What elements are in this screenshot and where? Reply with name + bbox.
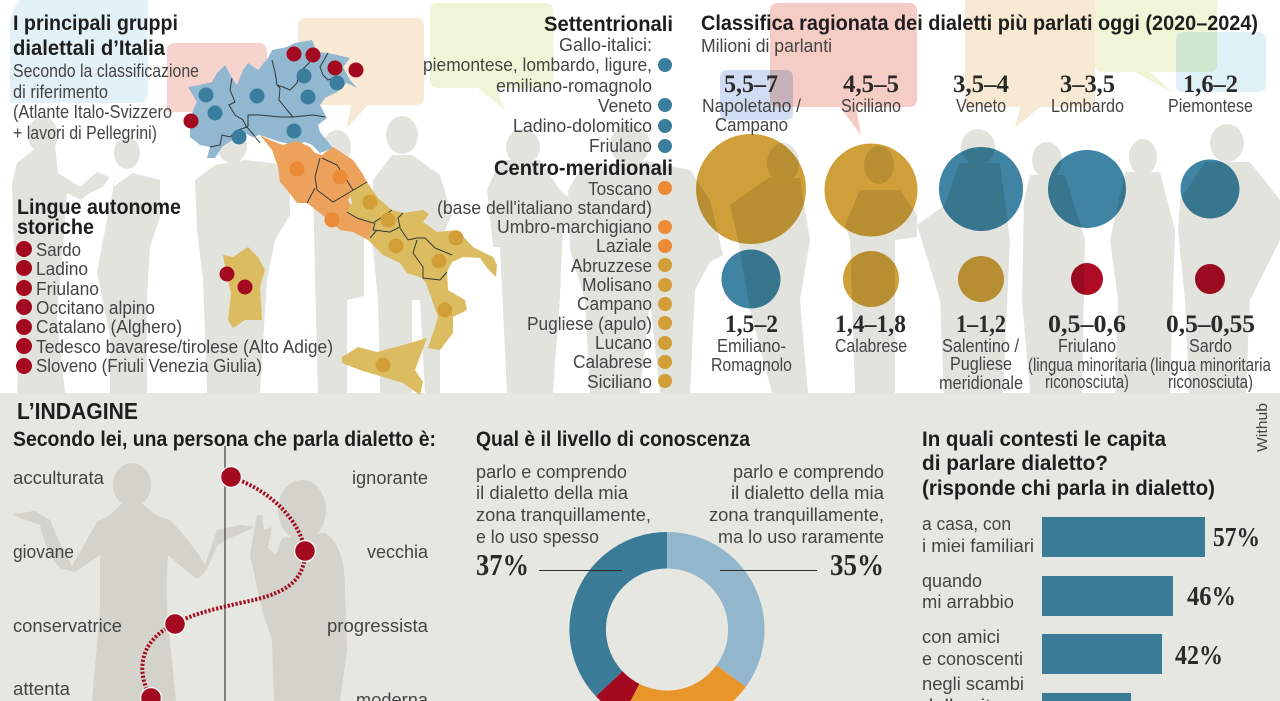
legend: historic autonomous languages: Catalano (Alghero) — [36, 317, 182, 337]
legend: northern dialects: Gallo-italici: — [559, 35, 652, 55]
heading: ranking: Milioni di parlanti — [701, 36, 832, 56]
bubble chart: speakers per dialect: Calabrese — [835, 336, 907, 356]
donut label: 37%: parlo e comprendo — [476, 462, 627, 482]
region: Sardinia — [223, 247, 265, 328]
region: north — [188, 40, 357, 158]
text block: classification source: (Atlante Italo-Svizzero — [13, 102, 172, 122]
legend: central-southern dialects: (base dell'italiano standard) — [437, 198, 652, 218]
source credit: Withub — [1254, 403, 1271, 452]
donut label: 35%: ma lo uso raramente — [718, 527, 884, 547]
donut label: 37% — [476, 462, 651, 582]
bubble chart: speakers per dialect: (lingua minoritaria — [1028, 355, 1148, 375]
legend: historic autonomous languages — [16, 196, 333, 376]
bar chart: contexts: 42% — [1175, 640, 1223, 670]
silhouettes: two people talking — [13, 463, 347, 701]
legend: northern dialects: Settentrionali — [544, 13, 673, 36]
legend: central-southern dialects: Toscano — [588, 179, 652, 199]
legend: central-southern dialects: Lucano — [595, 333, 652, 353]
bubble chart: speakers per dialect: 1,4–1,8 — [835, 311, 906, 338]
region: south — [347, 182, 497, 350]
legend: central-southern dialects: Centro-meridionali — [494, 157, 673, 180]
heading: perception question: Secondo lei, una persona che parla dialetto è: — [13, 428, 436, 451]
bubble chart: speakers per dialect: 3,5–4 — [953, 71, 1009, 98]
donut label: 35%: parlo e comprendo — [733, 462, 884, 482]
legend: historic autonomous languages: Sardo — [36, 240, 81, 260]
bar chart: contexts: i miei familiari — [922, 536, 1034, 556]
bubble chart: speakers per dialect: riconosciuta) — [1045, 372, 1129, 392]
heading: contexts question: In quali contesti le capita — [922, 428, 1166, 451]
bar chart: contexts: negli scambi — [922, 674, 1024, 694]
semantic differential chart — [13, 446, 429, 701]
bar chart: contexts: 57% — [1213, 522, 1260, 552]
legend: historic autonomous languages: Tedesco bavarese/tirolese (Alto Adige) — [36, 337, 333, 357]
bubble chart: speakers per dialect: Piemontese — [1168, 96, 1253, 116]
heading: main dialect groups — [13, 12, 178, 60]
donut label: 35%: il dialetto della mia — [731, 483, 885, 503]
bubble chart: speakers per dialect: riconosciuta) — [1168, 372, 1253, 392]
legend: northern dialects: Veneto — [598, 96, 652, 116]
semantic differential chart: ignorante — [352, 468, 428, 488]
legend: northern dialects: Friulano — [589, 136, 652, 156]
semantic differential chart: progressista — [327, 616, 429, 636]
bubble chart: speakers per dialect: meridionale — [939, 373, 1023, 393]
bubble chart: speakers per dialect: 0,5–0,55 — [1166, 311, 1255, 338]
legend: northern dialects: Ladino-dolomitico — [513, 116, 652, 136]
dots: autonomous languages — [184, 46, 364, 294]
crowd silhouettes — [12, 116, 1280, 393]
heading: main dialect groups: I principali gruppi — [13, 12, 178, 35]
legend: central-southern dialects: Siciliano — [587, 372, 652, 392]
bubble chart: speakers per dialect: 3–3,5 — [1060, 71, 1115, 98]
legend: historic autonomous languages: Friulano — [36, 279, 99, 299]
bar chart: contexts: e conoscenti — [922, 649, 1023, 669]
legend: central-southern dialects: Laziale — [596, 236, 652, 256]
heading: knowledge level: Qual è il livello di conoscenza — [476, 428, 750, 451]
semantic differential chart: attenta — [13, 679, 71, 699]
heading: contexts question — [922, 428, 1215, 500]
legend: central-southern dialects: Pugliese (apulo) — [527, 314, 652, 334]
semantic differential chart: giovane — [13, 542, 74, 562]
text block: classification source — [13, 61, 199, 143]
bubble chart: speakers per dialect: 1,6–2 — [1183, 71, 1238, 98]
bubble chart: speakers per dialect: Siciliano — [841, 96, 901, 116]
legend: central-southern dialects — [437, 157, 673, 392]
legend: central-southern dialects: Molisano — [582, 275, 652, 295]
bar chart: contexts — [922, 514, 1260, 701]
heading: contexts question: di parlare dialetto? — [922, 452, 1108, 475]
bubble chart: speakers per dialect: Emiliano- — [717, 336, 786, 356]
bubble chart: speakers per dialect: Friulano — [1058, 336, 1116, 356]
text block: classification source: + lavori di Pellegrini) — [13, 123, 157, 143]
dots: central dialects — [290, 162, 348, 228]
heading: main dialect groups: dialettali d’Italia — [13, 37, 165, 60]
donut label: 37%: il dialetto della mia — [476, 483, 629, 503]
bubble chart: speakers per dialect: Romagnolo — [711, 355, 792, 375]
bubble chart: speakers per dialect — [696, 71, 1272, 393]
bubble chart: speakers per dialect: 1,5–2 — [725, 311, 778, 338]
bubble chart: speakers per dialect: 1–1,2 — [956, 311, 1006, 338]
donut label: 37%: 37% — [476, 547, 529, 582]
bubble chart: speakers per dialect: 4,5–5 — [843, 71, 899, 98]
donut chart — [539, 532, 817, 701]
bubble chart: speakers per dialect: Sardo — [1189, 336, 1232, 356]
dots: northern dialects — [198, 68, 344, 144]
region borders — [210, 53, 452, 280]
donut label: 35% — [709, 462, 885, 582]
background: lower survey band — [0, 393, 1280, 701]
semantic differential chart: vecchia — [367, 542, 429, 562]
text block: classification source: di riferimento — [13, 82, 108, 102]
map of Italy — [184, 40, 497, 395]
heading: survey: L’INDAGINE — [17, 398, 138, 424]
legend: central-southern dialects: Abruzzese — [571, 256, 652, 276]
speech bubbles — [10, 0, 1266, 135]
text block: classification source: Secondo la classificazione — [13, 61, 199, 81]
heading: contexts question: (risponde chi parla in dialetto) — [922, 477, 1215, 500]
bubble chart: speakers per dialect: Campano — [715, 115, 788, 135]
legend: historic autonomous languages: Sloveno (Friuli Venezia Giulia) — [36, 356, 262, 376]
legend: historic autonomous languages: storiche — [17, 216, 94, 239]
bar chart: contexts: con amici — [922, 627, 1000, 647]
legend: central-southern dialects: Campano — [577, 294, 652, 314]
semantic differential chart: acculturata — [13, 468, 105, 488]
donut label: 37%: e lo uso spesso — [476, 527, 599, 547]
donut label: 35%: 35% — [830, 547, 884, 582]
bubble chart: speakers per dialect: Salentino / — [942, 336, 1019, 356]
donut label: 35%: zona tranquillamente, — [709, 505, 884, 525]
semantic differential chart: conservatrice — [13, 616, 122, 636]
legend: historic autonomous languages: Lingue autonome — [17, 196, 181, 219]
bar chart: contexts: quando — [922, 571, 982, 591]
legend: central-southern dialects: Umbro-marchigiano — [497, 217, 652, 237]
donut label: 37%: zona tranquillamente, — [476, 505, 651, 525]
bubble chart: speakers per dialect: 0,5–0,6 — [1048, 311, 1126, 338]
legend: northern dialects: emiliano-romagnolo — [496, 76, 652, 96]
bar chart: contexts: a casa, con — [922, 514, 1011, 534]
bubble chart: speakers per dialect: Veneto — [956, 96, 1006, 116]
bubble chart: speakers per dialect: Pugliese — [950, 354, 1012, 374]
legend: historic autonomous languages: Occitano alpino — [36, 298, 155, 318]
dots: southern dialects — [362, 194, 464, 372]
bar chart: contexts: 46% — [1187, 581, 1236, 611]
legend: central-southern dialects: Calabrese — [573, 352, 652, 372]
legend: northern dialects: piemontese, lombardo, ligure, — [423, 55, 652, 75]
legend: northern dialects — [423, 13, 673, 156]
bubble chart: speakers per dialect: Napoletano / — [702, 96, 801, 116]
heading: ranking — [701, 12, 1258, 56]
bubble chart: speakers per dialect: Lombardo — [1051, 96, 1124, 116]
legend: historic autonomous languages: Ladino — [36, 259, 88, 279]
heading: ranking: Classifica ragionata dei dialetti più parlati oggi (2020–2024) — [701, 12, 1258, 35]
region: Sicily — [342, 338, 427, 395]
bubble chart: speakers per dialect: 5,5–7 — [724, 71, 778, 98]
bar chart: contexts: mi arrabbio — [922, 592, 1014, 612]
region: centre — [260, 135, 373, 240]
